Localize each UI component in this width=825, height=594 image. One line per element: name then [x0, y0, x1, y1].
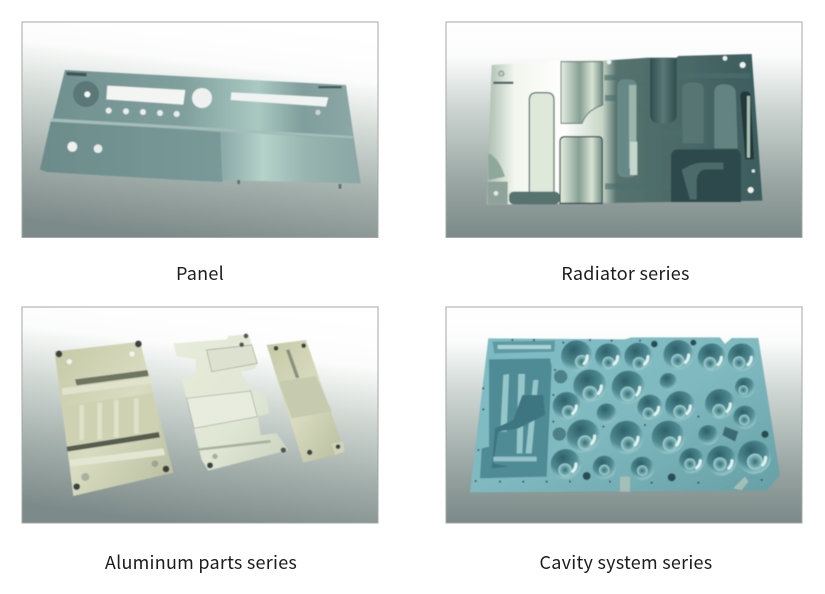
panel: Panel photo [22, 22, 378, 238]
plate: left [55, 341, 173, 496]
caption: Cavity system series: Cavity system series [540, 549, 712, 575]
metal front panel [40, 70, 361, 189]
caption: Aluminum parts series: Aluminum parts series [105, 549, 297, 575]
radiator plate [487, 54, 762, 205]
plate: middle [173, 334, 288, 471]
panel: Radiator series photo [446, 22, 802, 238]
panel: Aluminum parts series photo [22, 307, 378, 523]
caption: Panel: Panel [176, 260, 224, 286]
three aluminum parts [55, 334, 345, 496]
caption: Radiator series: Radiator series [561, 260, 690, 286]
panel: Cavity system series photo [446, 307, 802, 523]
plate: right [267, 340, 345, 463]
cavity plate [470, 337, 780, 492]
